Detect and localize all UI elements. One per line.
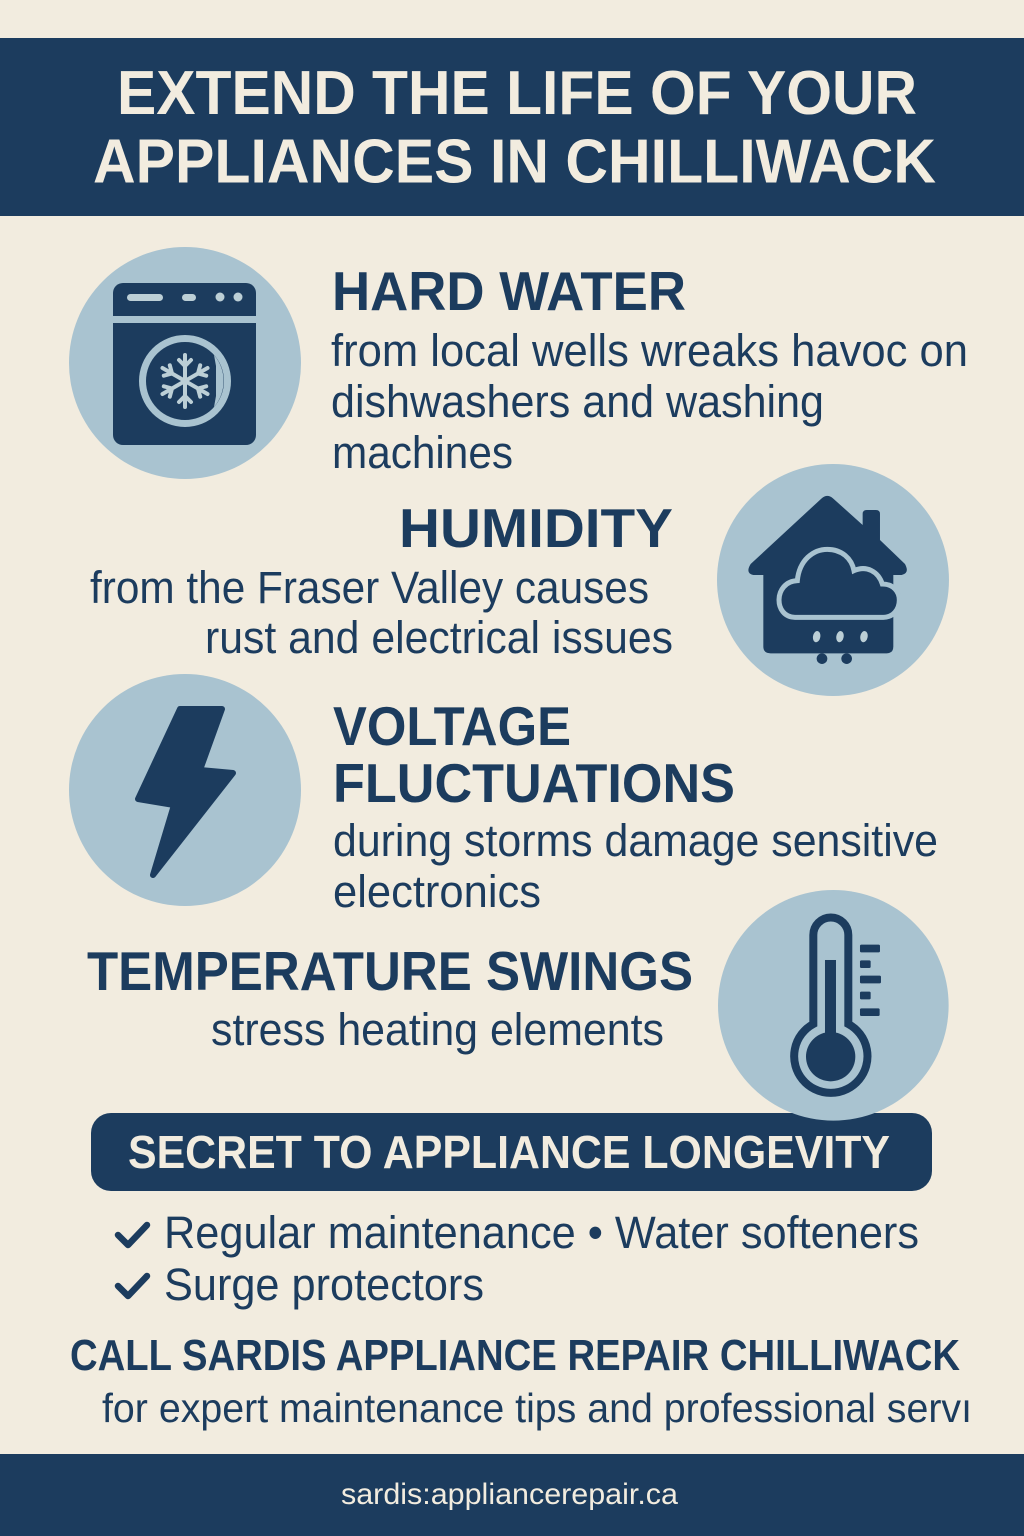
heading: voltage fluctuations [333, 695, 735, 814]
footer bar: sardis:appliancerepair.ca [341, 1478, 678, 1511]
text block: humidity: rust and electrical issues [205, 612, 673, 663]
checklist [118, 1207, 919, 1310]
heading: humidity: HUMIDITY [399, 497, 673, 559]
heading: voltage fluctuations: VOLTAGE [333, 695, 571, 757]
icon: thermometer [718, 890, 949, 1121]
panel: voltage fluctuations [69, 674, 938, 917]
call to action: for expert maintenance tips and professional servı [102, 1385, 972, 1431]
call to action [70, 1331, 972, 1431]
text block: humidity: from the Fraser Valley causes [90, 562, 649, 613]
icon: check mark [118, 1276, 147, 1296]
text block: voltage fluctuations: electronics [333, 866, 541, 917]
icon: washing machine with snowflake [69, 247, 301, 479]
checklist line two: Surge protectors [164, 1259, 484, 1310]
panel: hard water [69, 247, 968, 479]
panel: temperature swings [87, 890, 949, 1121]
longevity banner: SECRET TO APPLIANCE LONGEVITY [128, 1126, 890, 1178]
icon: lightning bolt [69, 674, 301, 906]
footer bar [0, 1454, 1024, 1536]
text block: hard water [331, 325, 968, 478]
icon: house with rain cloud [717, 464, 949, 696]
panel: humidity [90, 464, 949, 696]
heading: temperature swings: TEMPERATURE SWINGS [87, 940, 693, 1002]
title banner [0, 38, 1024, 216]
heading: voltage fluctuations: FLUCTUATIONS [333, 752, 735, 814]
text block: humidity [90, 562, 673, 663]
text block: temperature swings: stress heating elements [211, 1004, 664, 1055]
longevity banner [91, 1113, 932, 1191]
title banner: APPLIANCES IN CHILLIWACK [93, 128, 936, 196]
icon: check mark [118, 1225, 147, 1245]
text block: voltage fluctuations [333, 815, 938, 917]
text block: hard water: from local wells wreaks havoc on [331, 325, 968, 376]
title banner: EXTEND THE LIFE OF YOUR [117, 59, 917, 128]
text block: hard water: machines [332, 427, 513, 478]
heading: hard water: HARD WATER [332, 260, 686, 322]
checklist line one: Regular maintenance • Water softeners [164, 1207, 919, 1258]
text block: voltage fluctuations: during storms damage sensitive [333, 815, 938, 866]
text block: hard water: dishwashers and washing [331, 376, 824, 427]
